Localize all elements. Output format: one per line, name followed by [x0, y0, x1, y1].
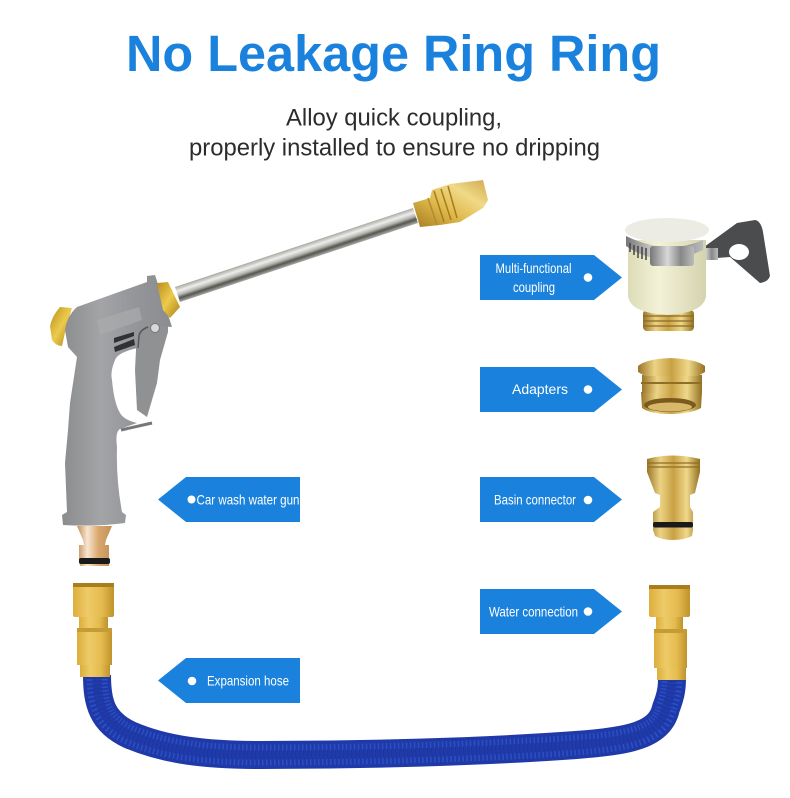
callout: multi-functional coupling: coupling [513, 279, 555, 295]
callout: adapters: Adapters [512, 381, 568, 397]
icon: basin connector [647, 456, 700, 540]
icon: expansion hose [73, 583, 690, 755]
callout: multi-functional coupling [480, 255, 622, 300]
trigger slit [138, 327, 148, 348]
callout: expansion hose [158, 658, 300, 703]
icon: multi-functional coupling [625, 218, 770, 331]
callout: car wash water gun [158, 477, 300, 522]
icon: car wash water gun [50, 180, 488, 566]
gun trigger [135, 322, 168, 417]
icon: adapter [638, 358, 705, 414]
gun lance rod [175, 208, 418, 302]
coupling key [697, 220, 770, 283]
callout: car wash water gun: Car wash water gun [196, 492, 300, 508]
gun body highlight [97, 307, 142, 335]
subtitle [189, 104, 600, 162]
callout: water connection [480, 589, 622, 634]
callout: expansion hose: Expansion hose [207, 672, 289, 688]
quick connector [77, 526, 112, 566]
left hose fitting [73, 583, 114, 677]
brass nozzle [413, 180, 488, 227]
trigger clip [121, 423, 152, 430]
coupling clamp [626, 236, 703, 266]
pivot screw [150, 324, 160, 332]
hose tube [97, 675, 672, 755]
gun vent slots [114, 332, 135, 352]
coupling cap [625, 218, 709, 242]
callout: basin connector: Basin connector [494, 492, 576, 508]
right hose fitting [649, 585, 690, 680]
callout: basin connector [480, 477, 622, 522]
callout: multi-functional coupling: Multi-functional [496, 260, 572, 276]
subtitle: Alloy quick coupling, [286, 104, 502, 132]
subtitle: properly installed to ensure no dripping [189, 134, 600, 162]
callout: water connection: Water connection [489, 604, 578, 620]
rear brass cap [50, 307, 72, 346]
coupling brass thread [643, 310, 694, 331]
title: No Leakage Ring Ring [126, 25, 661, 82]
brass collar [157, 282, 180, 318]
gun body [62, 275, 172, 526]
callout: adapters [480, 367, 622, 412]
coupling body [628, 240, 706, 315]
